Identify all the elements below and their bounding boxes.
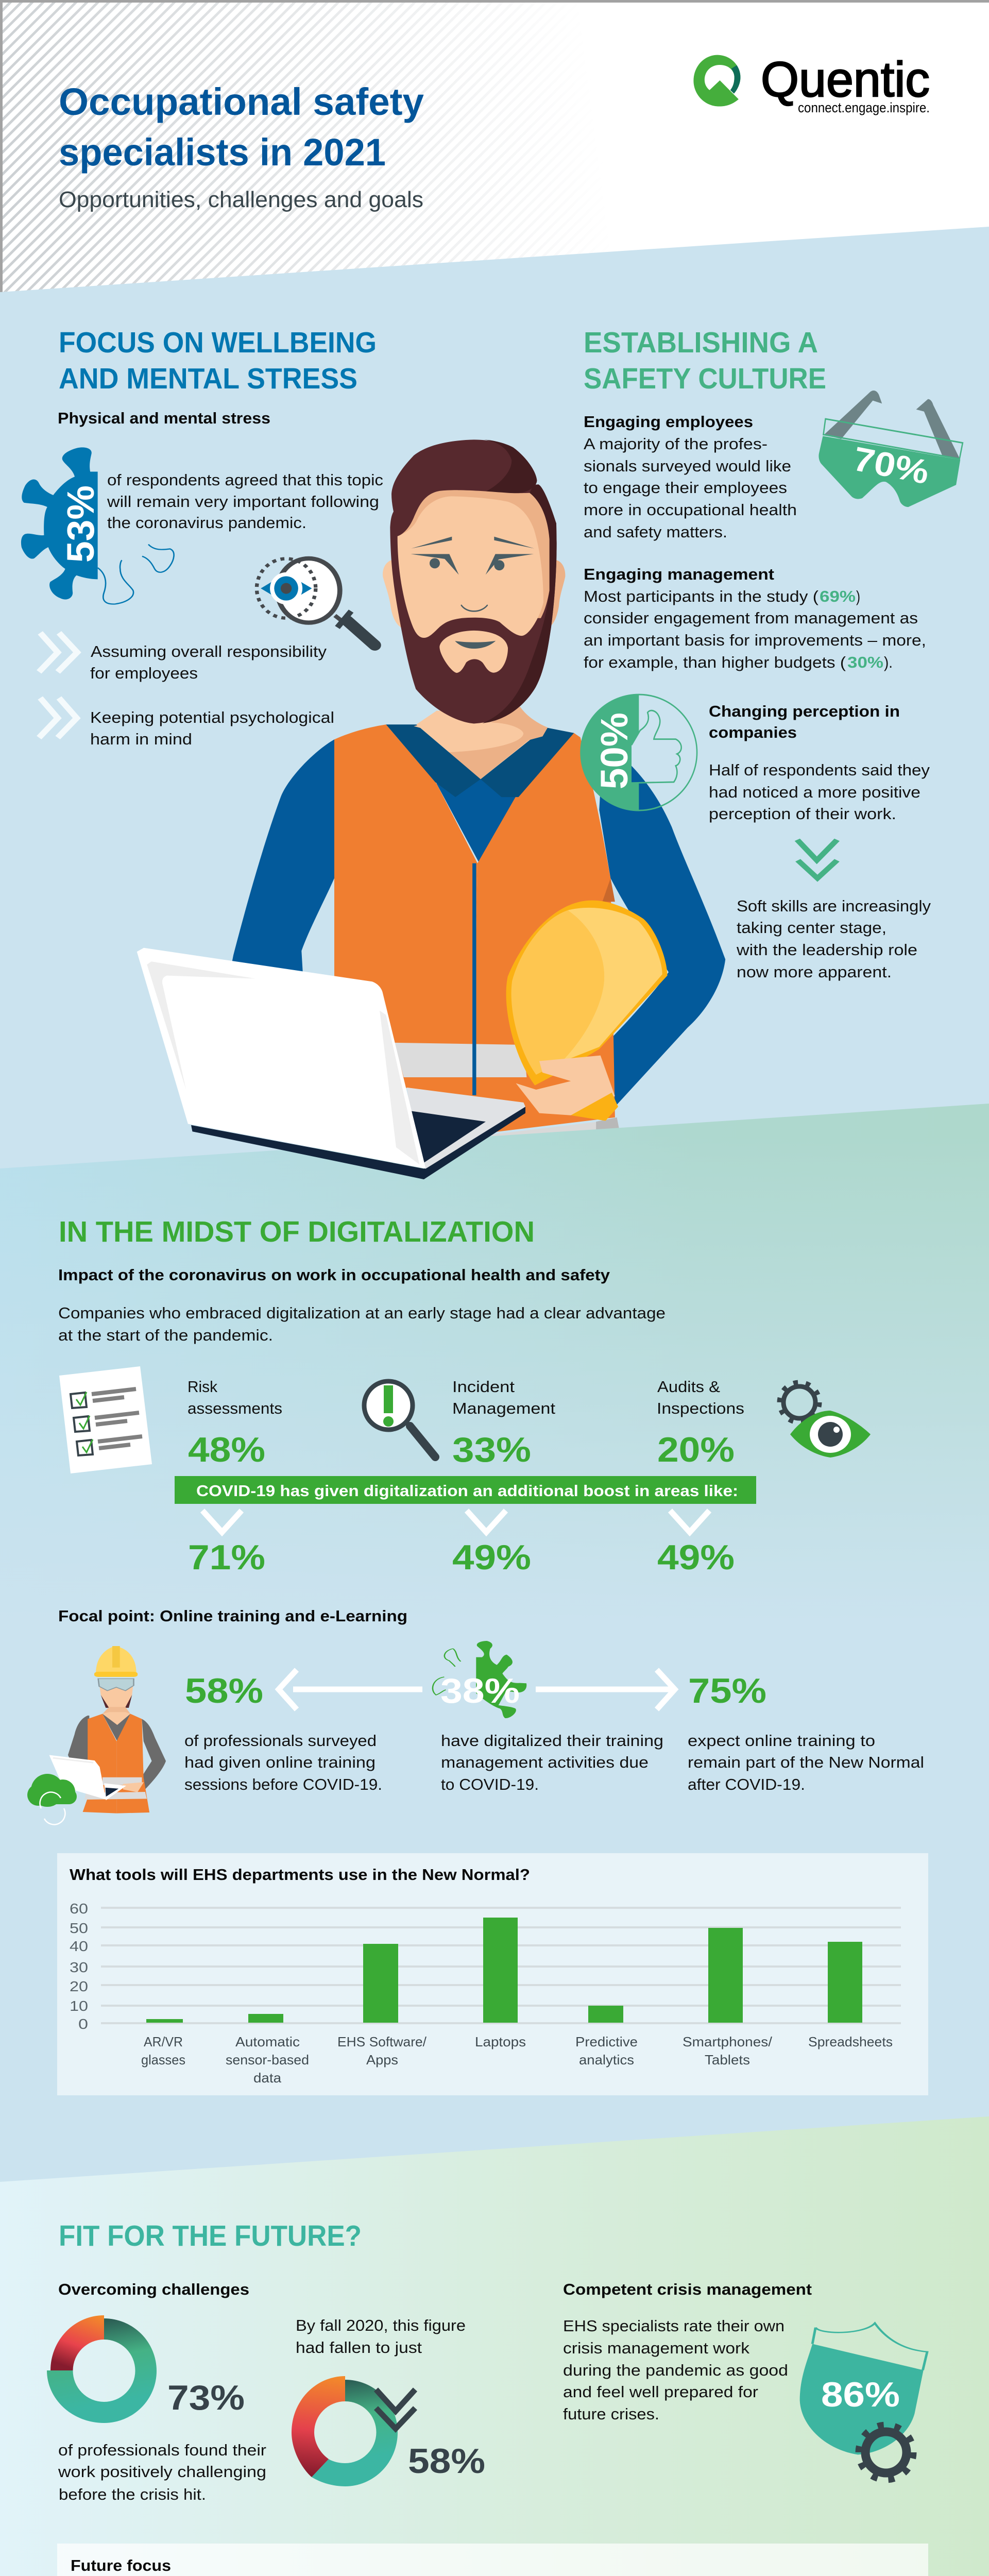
stat group: risk assessments: 48%	[188, 1430, 265, 1469]
illustration: safety officer body	[232, 711, 725, 1156]
icon: safety goggles with 70 percent	[819, 391, 963, 507]
text: soft skills: with the leadership role	[736, 941, 917, 959]
category labels: Spreadsheets	[808, 2034, 893, 2049]
stat: 58 percent online training: sessions before COVID-19.	[184, 1775, 382, 1793]
icon: dark double chevron down	[376, 2389, 415, 2429]
icon: shield with 86 percent and gear: 86%	[821, 2375, 900, 2414]
heading: in the midst of digitalization: IN THE MIDST OF DIGITALIZATION	[59, 1215, 535, 1248]
category labels: glasses	[141, 2052, 185, 2067]
stat: 38 percent digitalized: 38%	[440, 1671, 520, 1710]
text: engaging management: an important basis for improvements – more,	[584, 631, 926, 649]
stat group: audits and inspections: Inspections	[657, 1399, 744, 1417]
icon: thumbs up badge with 50 percent: 50%	[593, 713, 636, 789]
text: by fall 2020: had fallen to just	[296, 2338, 422, 2357]
subheading: focal point: Focal point: Online training and e-Learning	[58, 1607, 407, 1625]
stat group: risk assessments: assessments	[187, 1399, 282, 1417]
category labels: AR/VR	[144, 2034, 183, 2049]
stat: 75 percent new normal	[688, 1671, 924, 1793]
text: overall responsibility: Assuming overall responsibility	[91, 642, 327, 660]
text: 53 percent statement: will remain very important following	[107, 493, 379, 511]
icon: double chevron	[39, 633, 77, 672]
illustration: open laptop	[137, 948, 525, 1179]
stat: 38 percent digitalized: to COVID-19.	[441, 1775, 539, 1793]
stat: 58 percent: 58%	[408, 2442, 485, 2481]
y axis and grid lines: 50	[70, 1920, 88, 1936]
stat group: incident management	[452, 1378, 555, 1469]
text: psychological harm	[90, 708, 334, 748]
subheading: Overcoming challenges	[58, 2280, 249, 2298]
icon: gear and eye	[779, 1382, 871, 1458]
logo: Quentic	[693, 52, 930, 115]
text: crisis management: crisis management work	[563, 2339, 750, 2357]
heading: establishing a safety culture	[584, 326, 826, 395]
text: engaging management: Engaging management	[584, 565, 774, 583]
y axis and grid lines: 30	[70, 1959, 88, 1975]
text: soft skills: now more apparent.	[737, 963, 892, 981]
text: by fall 2020: By fall 2020, this figure	[296, 2316, 466, 2334]
text: before the crisis	[58, 2441, 266, 2503]
section background: digitalization	[0, 1104, 989, 2215]
text: engaging employees: and safety matters.	[584, 523, 727, 541]
text: engaging management: consider engagement from management as	[584, 609, 918, 627]
panel: future focus bar chart	[57, 2544, 928, 2576]
stat group: risk assessments	[187, 1378, 282, 1469]
category labels: Laptops	[475, 2034, 526, 2049]
icon: green double chevron down	[797, 840, 837, 878]
text: before the crisis: before the crisis hit.	[59, 2485, 206, 2503]
donut chart: 58 percent	[292, 2376, 398, 2486]
text: engaging employees: Engaging employees	[584, 413, 753, 431]
icon: virus with 53 percent: 53%	[59, 485, 102, 563]
arrow: right	[536, 1670, 675, 1709]
icon: green virus	[433, 1641, 526, 1718]
text: soft skills: Soft skills are increasingly	[737, 897, 931, 915]
text: engaging management: for example, than higher budgets (	[584, 653, 846, 671]
category labels: Tablets	[705, 2052, 750, 2067]
stat: 75 percent new normal: after COVID-19.	[688, 1775, 805, 1793]
category labels	[141, 2034, 893, 2086]
text: changing perception: perception of their work.	[709, 805, 896, 823]
text: psychological harm: harm in mind	[90, 730, 192, 748]
icon: safety goggles with 70 percent: 70%	[850, 439, 932, 491]
text: physical and mental stress	[21, 409, 383, 604]
heading: focus on wellbeing: FOCUS ON WELLBEING	[59, 326, 377, 359]
text: soft skills: taking center stage,	[737, 919, 886, 937]
stat group: incident management: Incident	[452, 1378, 515, 1396]
illustration: worker with laptop	[49, 1646, 166, 1814]
y axis and grid lines: 60	[70, 1901, 88, 1917]
text: before the crisis: of professionals found their	[58, 2441, 266, 2459]
title	[59, 80, 424, 174]
text: before the crisis: work positively challenging	[58, 2463, 266, 2481]
category labels: analytics	[579, 2052, 634, 2067]
icon: thumbs up badge with 50 percent	[581, 694, 697, 810]
chart title: Future focus	[71, 2556, 171, 2574]
subtitle: Opportunities, challenges and goals	[59, 187, 423, 212]
bars	[146, 1918, 862, 2023]
text: changing perception	[709, 702, 930, 823]
logo: Quentic: connect.engage.inspire.	[798, 100, 930, 115]
panel: EHS tools bar chart	[57, 1853, 928, 2095]
category labels: EHS Software/	[337, 2034, 427, 2049]
icon: magnifier with exclamation mark	[364, 1381, 435, 1457]
heading: establishing a safety culture: ESTABLISHING A	[584, 326, 818, 359]
stat: 38 percent digitalized: management activities due	[441, 1753, 649, 1771]
text: companies intro: at the start of the pandemic.	[58, 1326, 273, 1344]
stat group: audits and inspections	[657, 1378, 744, 1469]
heading: establishing a safety culture: SAFETY CULTURE	[584, 362, 826, 395]
block: overcoming challenges	[47, 2280, 485, 2503]
block: competent crisis management	[563, 2280, 927, 2480]
title: specialists in 2021	[59, 131, 386, 174]
icon: checklist	[59, 1366, 152, 1473]
stat: 75 percent new normal: 75%	[688, 1671, 766, 1710]
icon: magnifier with eye	[257, 558, 375, 645]
stat: 75 percent new normal: remain part of the New Normal	[688, 1753, 924, 1771]
category labels: sensor-based	[226, 2052, 309, 2067]
section background: wellbeing and safety culture	[0, 227, 989, 1185]
text: engaging employees: sionals surveyed would like	[584, 457, 791, 475]
category labels: data	[253, 2070, 282, 2086]
text: soft skills	[736, 897, 931, 981]
stat: 58 percent online training: had given online training	[184, 1753, 376, 1771]
subheading: Physical and mental stress	[58, 409, 270, 427]
text: engaging management: )	[856, 587, 860, 605]
text: changing perception: companies	[709, 723, 797, 741]
arrows: white chevrons down	[202, 1511, 709, 1532]
banner: covid boost	[175, 1476, 756, 1504]
category labels: Apps	[366, 2052, 398, 2067]
heading: focus on wellbeing: AND MENTAL STRESS	[59, 362, 357, 395]
text: companies intro: Companies who embraced digitalization at an early stage had a clear advantage	[58, 1304, 666, 1322]
text: by fall 2020	[296, 2316, 466, 2357]
illustration: safety officer head	[383, 439, 565, 742]
bullet list: responsibilities	[39, 633, 334, 748]
category labels: Predictive	[575, 2034, 638, 2049]
text: engaging employees: more in occupational health	[584, 501, 797, 519]
arrow: left	[279, 1670, 422, 1709]
text: engaging management: Most participants in the study (	[584, 587, 819, 605]
text: changing perception: Changing perception in	[709, 702, 900, 720]
y axis and grid lines: 0	[78, 2016, 88, 2032]
section background: fit for the future	[0, 2116, 989, 2576]
icon: double chevron	[39, 698, 77, 738]
y axis and grid lines: 40	[70, 1938, 88, 1954]
text: crisis management: and feel well prepared for	[563, 2383, 758, 2401]
heading: focus on wellbeing	[59, 326, 377, 395]
subheading: Competent crisis management	[563, 2280, 812, 2298]
text: crisis management: during the pandemic as good	[563, 2361, 788, 2379]
subheading: impact of the coronavirus: Impact of the coronavirus on work in occupational health and safety	[58, 1266, 610, 1284]
stat: 38 percent digitalized	[440, 1671, 663, 1793]
icon: shield with 86 percent and gear	[800, 2323, 927, 2480]
text: engaging employees: to engage their employees	[584, 479, 787, 497]
text: crisis management: future crises.	[563, 2405, 659, 2423]
y axis and grid lines: 10	[70, 1998, 88, 2014]
category labels: Automatic	[235, 2034, 300, 2049]
stat: 73 percent: 73%	[167, 2378, 245, 2417]
text: overall responsibility	[90, 642, 327, 682]
stats: increased percentages: 71%	[188, 1538, 265, 1577]
text: psychological harm: Keeping potential psychological	[90, 708, 334, 726]
icon: cloud with sync arrows	[27, 1774, 77, 1824]
text: engaging management: 30%	[847, 653, 883, 671]
header hatch pattern	[3, 3, 520, 292]
stats: increased percentages: 49%	[657, 1538, 735, 1577]
heading: fit for the future: FIT FOR THE FUTURE?	[59, 2219, 362, 2252]
text: engaging employees	[584, 413, 797, 541]
stat: 58 percent online training: 58%	[185, 1671, 263, 1710]
stats: increased percentages: 49%	[452, 1538, 531, 1577]
stat group: risk assessments: Risk	[187, 1378, 217, 1396]
text: changing perception: Half of respondents said they	[709, 761, 930, 779]
text: engaging management: 69%	[820, 587, 856, 605]
category labels: Smartphones/	[683, 2034, 773, 2049]
text: changing perception: had noticed a more positive	[709, 783, 920, 801]
text: engaging management: ).	[884, 653, 893, 671]
stat group: incident management: 33%	[452, 1430, 531, 1469]
text: 53 percent statement: the coronavirus pandemic.	[107, 514, 306, 532]
title: Occupational safety	[59, 80, 424, 123]
text: engaging employees: A majority of the profes-	[584, 435, 768, 453]
stat: 75 percent new normal: expect online training to	[688, 1732, 875, 1750]
header title block	[59, 80, 424, 212]
stats: increased percentages	[188, 1538, 735, 1577]
stat: 58 percent online training: of professionals surveyed	[184, 1732, 377, 1750]
text: companies intro	[58, 1304, 666, 1344]
logo: Quentic: Quentic	[761, 52, 930, 107]
stat group: audits and inspections: 20%	[657, 1430, 735, 1469]
stat group: incident management: Management	[452, 1399, 555, 1417]
text: 53 percent statement: of respondents agreed that this topic	[107, 471, 383, 489]
y axis and grid lines: 20	[70, 1978, 88, 1994]
donut chart: 73 percent	[47, 2315, 157, 2423]
text: engaging management	[584, 565, 926, 671]
text: crisis management: EHS specialists rate their own	[563, 2317, 785, 2335]
text: 53 percent statement	[107, 471, 383, 532]
icon: virus with 53 percent	[21, 447, 174, 604]
y axis and grid lines	[70, 1901, 901, 2032]
stat: 58 percent online training	[184, 1671, 382, 1793]
text: overall responsibility: for employees	[90, 664, 198, 682]
stat group: audits and inspections: Audits &	[657, 1378, 720, 1396]
banner: covid boost: COVID-19 has given digitalization an additional boost in areas like:	[196, 1482, 738, 1500]
chart title: What tools will EHS departments use in the New Normal?	[70, 1866, 530, 1884]
stat: 38 percent digitalized: have digitalized their training	[441, 1732, 663, 1750]
text: crisis management	[563, 2317, 788, 2423]
